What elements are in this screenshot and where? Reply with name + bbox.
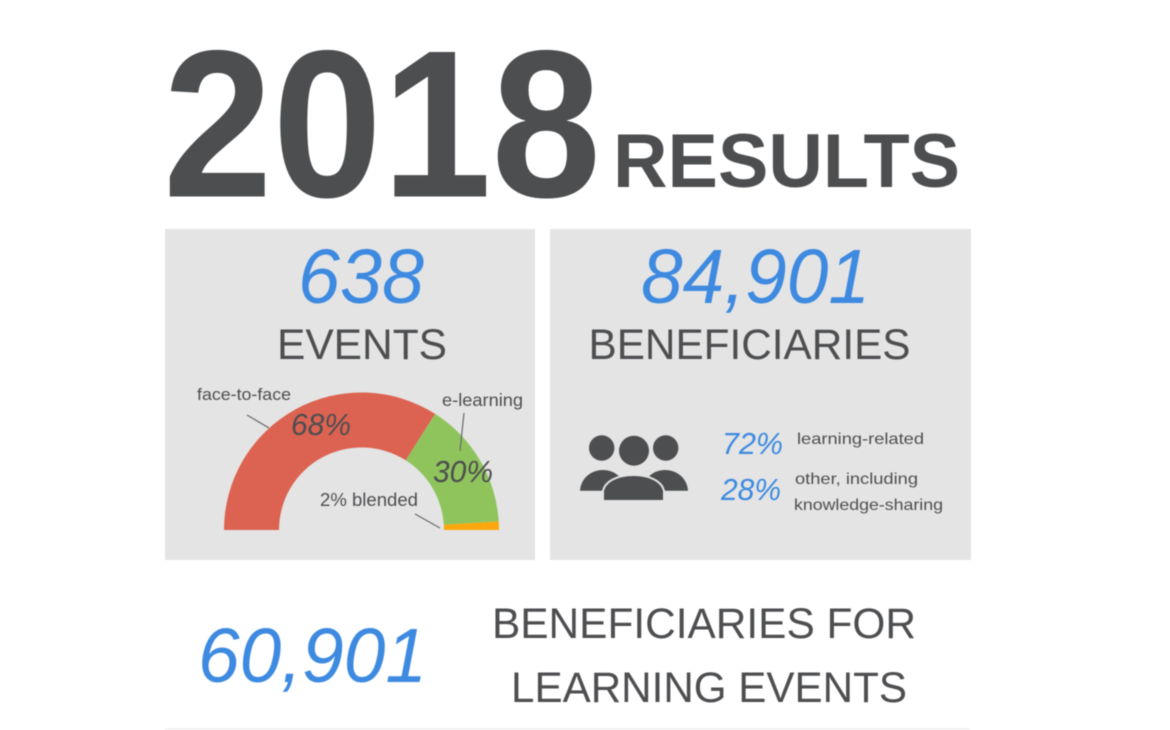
stat: other: other, including — [795, 471, 918, 488]
learning events count: 60,901 — [198, 613, 427, 699]
learning events label — [492, 600, 916, 712]
learning events label: LEARNING EVENTS — [511, 664, 907, 712]
gauge chart: 30% — [433, 454, 493, 489]
panel: events — [165, 229, 535, 560]
stat: learning-related: learning-related — [797, 431, 924, 448]
stat: learning-related: 72% — [722, 426, 783, 461]
gauge chart: e-learning — [442, 390, 523, 410]
stat: other: 28% — [720, 472, 781, 507]
panel: beneficiaries — [550, 229, 971, 560]
gauge chart: face-to-face — [197, 386, 291, 404]
title: RESULTS — [613, 119, 960, 204]
beneficiaries count: 84,901 — [641, 234, 870, 320]
title: 2018 — [163, 6, 601, 242]
events count: 638 — [298, 234, 424, 320]
gauge chart: 2% blended — [320, 490, 418, 510]
events heading: EVENTS — [277, 321, 447, 369]
gauge chart: 68% — [291, 407, 351, 442]
title — [163, 6, 960, 242]
learning events label: BENEFICIARIES FOR — [492, 600, 916, 648]
gauge chart — [197, 386, 523, 530]
stat: other: knowledge-sharing — [794, 497, 943, 514]
stat: other — [720, 471, 943, 514]
icon: people — [580, 435, 688, 500]
beneficiaries heading: BENEFICIARIES — [588, 321, 910, 369]
stat: learning-related — [722, 426, 924, 461]
